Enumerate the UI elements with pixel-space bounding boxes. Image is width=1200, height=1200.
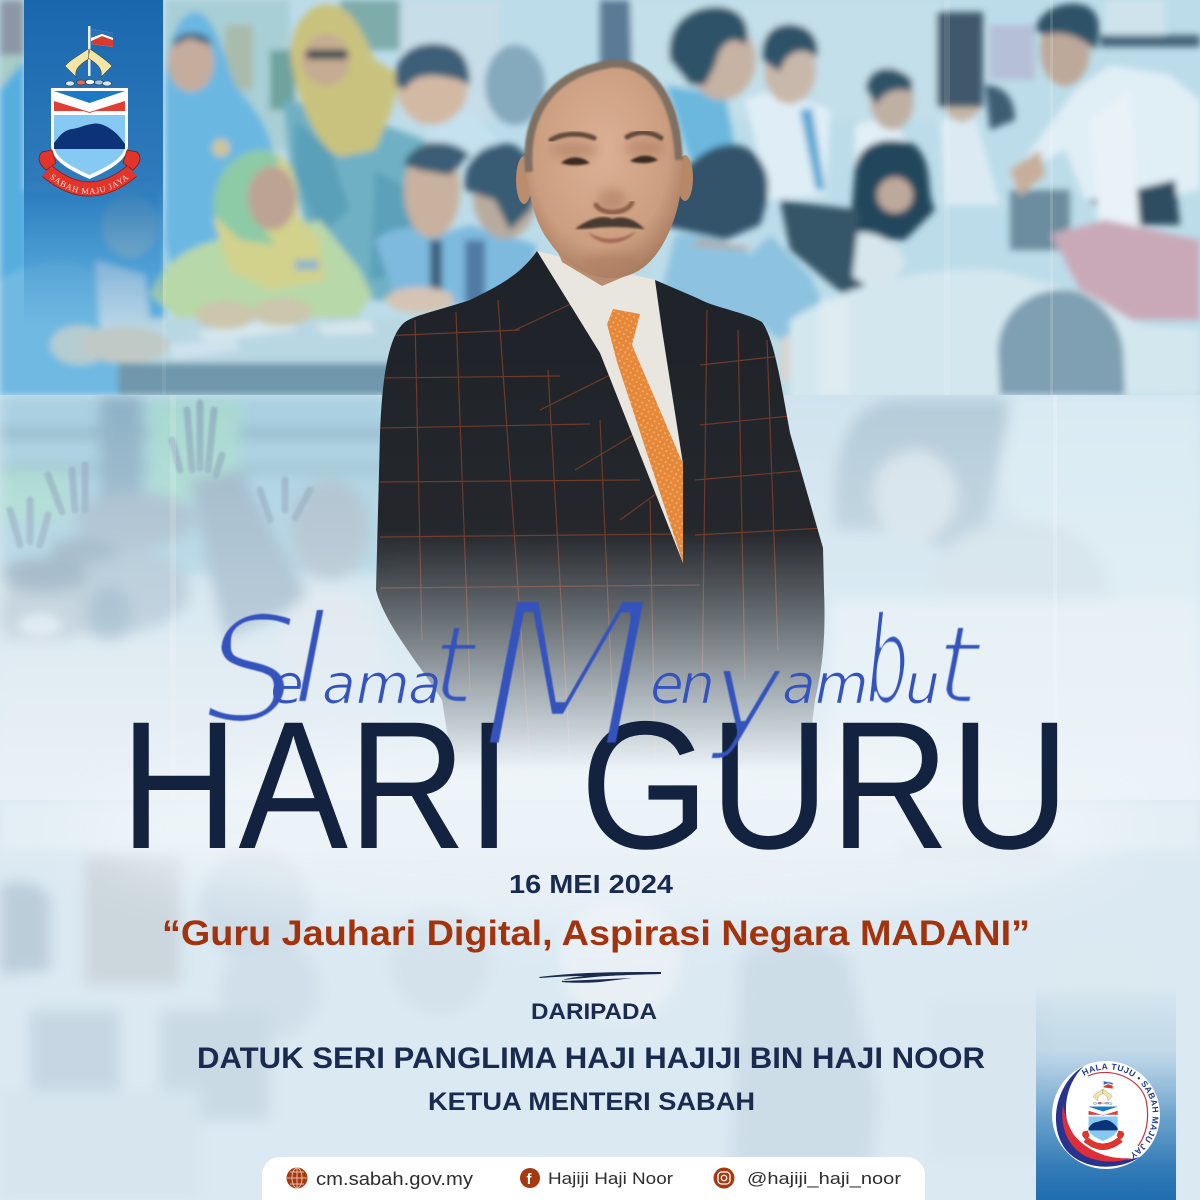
badge lettering: HALA TUJU • SABAH MAJU JAYA — [1082, 1064, 1158, 1158]
icon: facebook: f — [526, 1171, 532, 1188]
icon: facebook — [520, 1168, 540, 1188]
footer contact bar — [262, 1157, 925, 1200]
tall letters: l — [292, 588, 327, 733]
small letters: e — [270, 652, 304, 716]
head — [527, 62, 682, 278]
tall letters: t — [432, 601, 479, 729]
tie — [607, 309, 683, 563]
facial shading — [551, 139, 665, 270]
GURU: GURU — [580, 683, 1070, 887]
main title — [120, 683, 1070, 887]
small letters: a — [782, 652, 816, 716]
two boys — [375, 225, 537, 310]
red arc under text — [1088, 1072, 1148, 1146]
small letters: m — [356, 652, 410, 716]
male teacher — [1010, 65, 1200, 200]
green hijab teacher — [150, 220, 372, 320]
name: DATUK SERI PANGLIMA HAJI HAJIJI BIN HAJI NOOR — [197, 1042, 985, 1075]
soft haze behind title — [80, 740, 1120, 920]
greeting script: S — [204, 584, 299, 758]
tall letters: y — [709, 625, 785, 764]
right side pupils — [600, 0, 940, 120]
blue hijab pupil — [165, 12, 275, 270]
ears — [516, 156, 530, 204]
back of head — [998, 290, 1125, 395]
small letters: m — [815, 652, 869, 716]
background photo: classroom rows — [0, 815, 1185, 1157]
portrait of Chief Minister — [376, 62, 825, 780]
jacket plaid — [380, 295, 825, 760]
background photo: pupils raising hands — [0, 395, 1200, 800]
tall letters: t — [936, 601, 983, 729]
greeting script: b — [866, 591, 909, 733]
HARI: HARI — [120, 683, 512, 887]
table and notebooks — [115, 318, 405, 363]
dark haired girl — [850, 140, 935, 240]
bench and background — [165, 0, 290, 150]
small letters: a — [322, 652, 356, 716]
capital letters: M — [478, 558, 655, 796]
small letters: a — [408, 652, 442, 716]
position: KETUA MENTERI SABAH — [428, 1088, 755, 1116]
yellow hijab teacher — [283, 100, 425, 300]
blue panel top left — [24, 0, 163, 330]
instagram handle: @hajiji_haji_noor — [747, 1169, 901, 1188]
shirt — [537, 251, 683, 563]
divider scribble — [539, 972, 661, 983]
blue crescent — [1056, 1066, 1140, 1167]
mouth — [588, 231, 636, 243]
small letters: n — [680, 652, 715, 716]
small letters: e — [650, 652, 684, 716]
hair — [528, 64, 679, 172]
website: cm.sabah.gov.my — [316, 1169, 473, 1189]
boy 1 — [430, 122, 502, 166]
facebook name: Hajiji Haji Noor — [548, 1169, 673, 1188]
left side figures — [0, 0, 24, 55]
background photo: teachers and pupils in classroom — [0, 0, 1200, 400]
red crescent — [1062, 1105, 1132, 1162]
icon: instagram — [714, 1168, 734, 1188]
logo: Sabah state crest — [38, 26, 140, 196]
eyebrows — [551, 133, 661, 140]
small crest — [1082, 1080, 1124, 1147]
blue panel bottom right — [1036, 985, 1176, 1200]
small letters: u — [905, 652, 940, 716]
icon: globe — [286, 1168, 308, 1188]
jacket — [376, 251, 825, 780]
nose — [596, 203, 632, 212]
motto on ribbon: SABAH MAJU JAYA — [50, 174, 129, 194]
tabletop — [790, 269, 1200, 400]
greeting script — [204, 558, 983, 796]
moustache — [578, 218, 642, 228]
neck — [558, 252, 640, 286]
date: 16 MEI 2024 — [509, 869, 674, 899]
eyes — [561, 156, 658, 165]
from label: DARIPADA — [531, 999, 657, 1024]
theme quote: “Guru Jauhari Digital, Aspirasi Negara MADANI” — [162, 914, 1030, 953]
foreground boy — [660, 144, 768, 240]
red box — [1052, 220, 1200, 320]
